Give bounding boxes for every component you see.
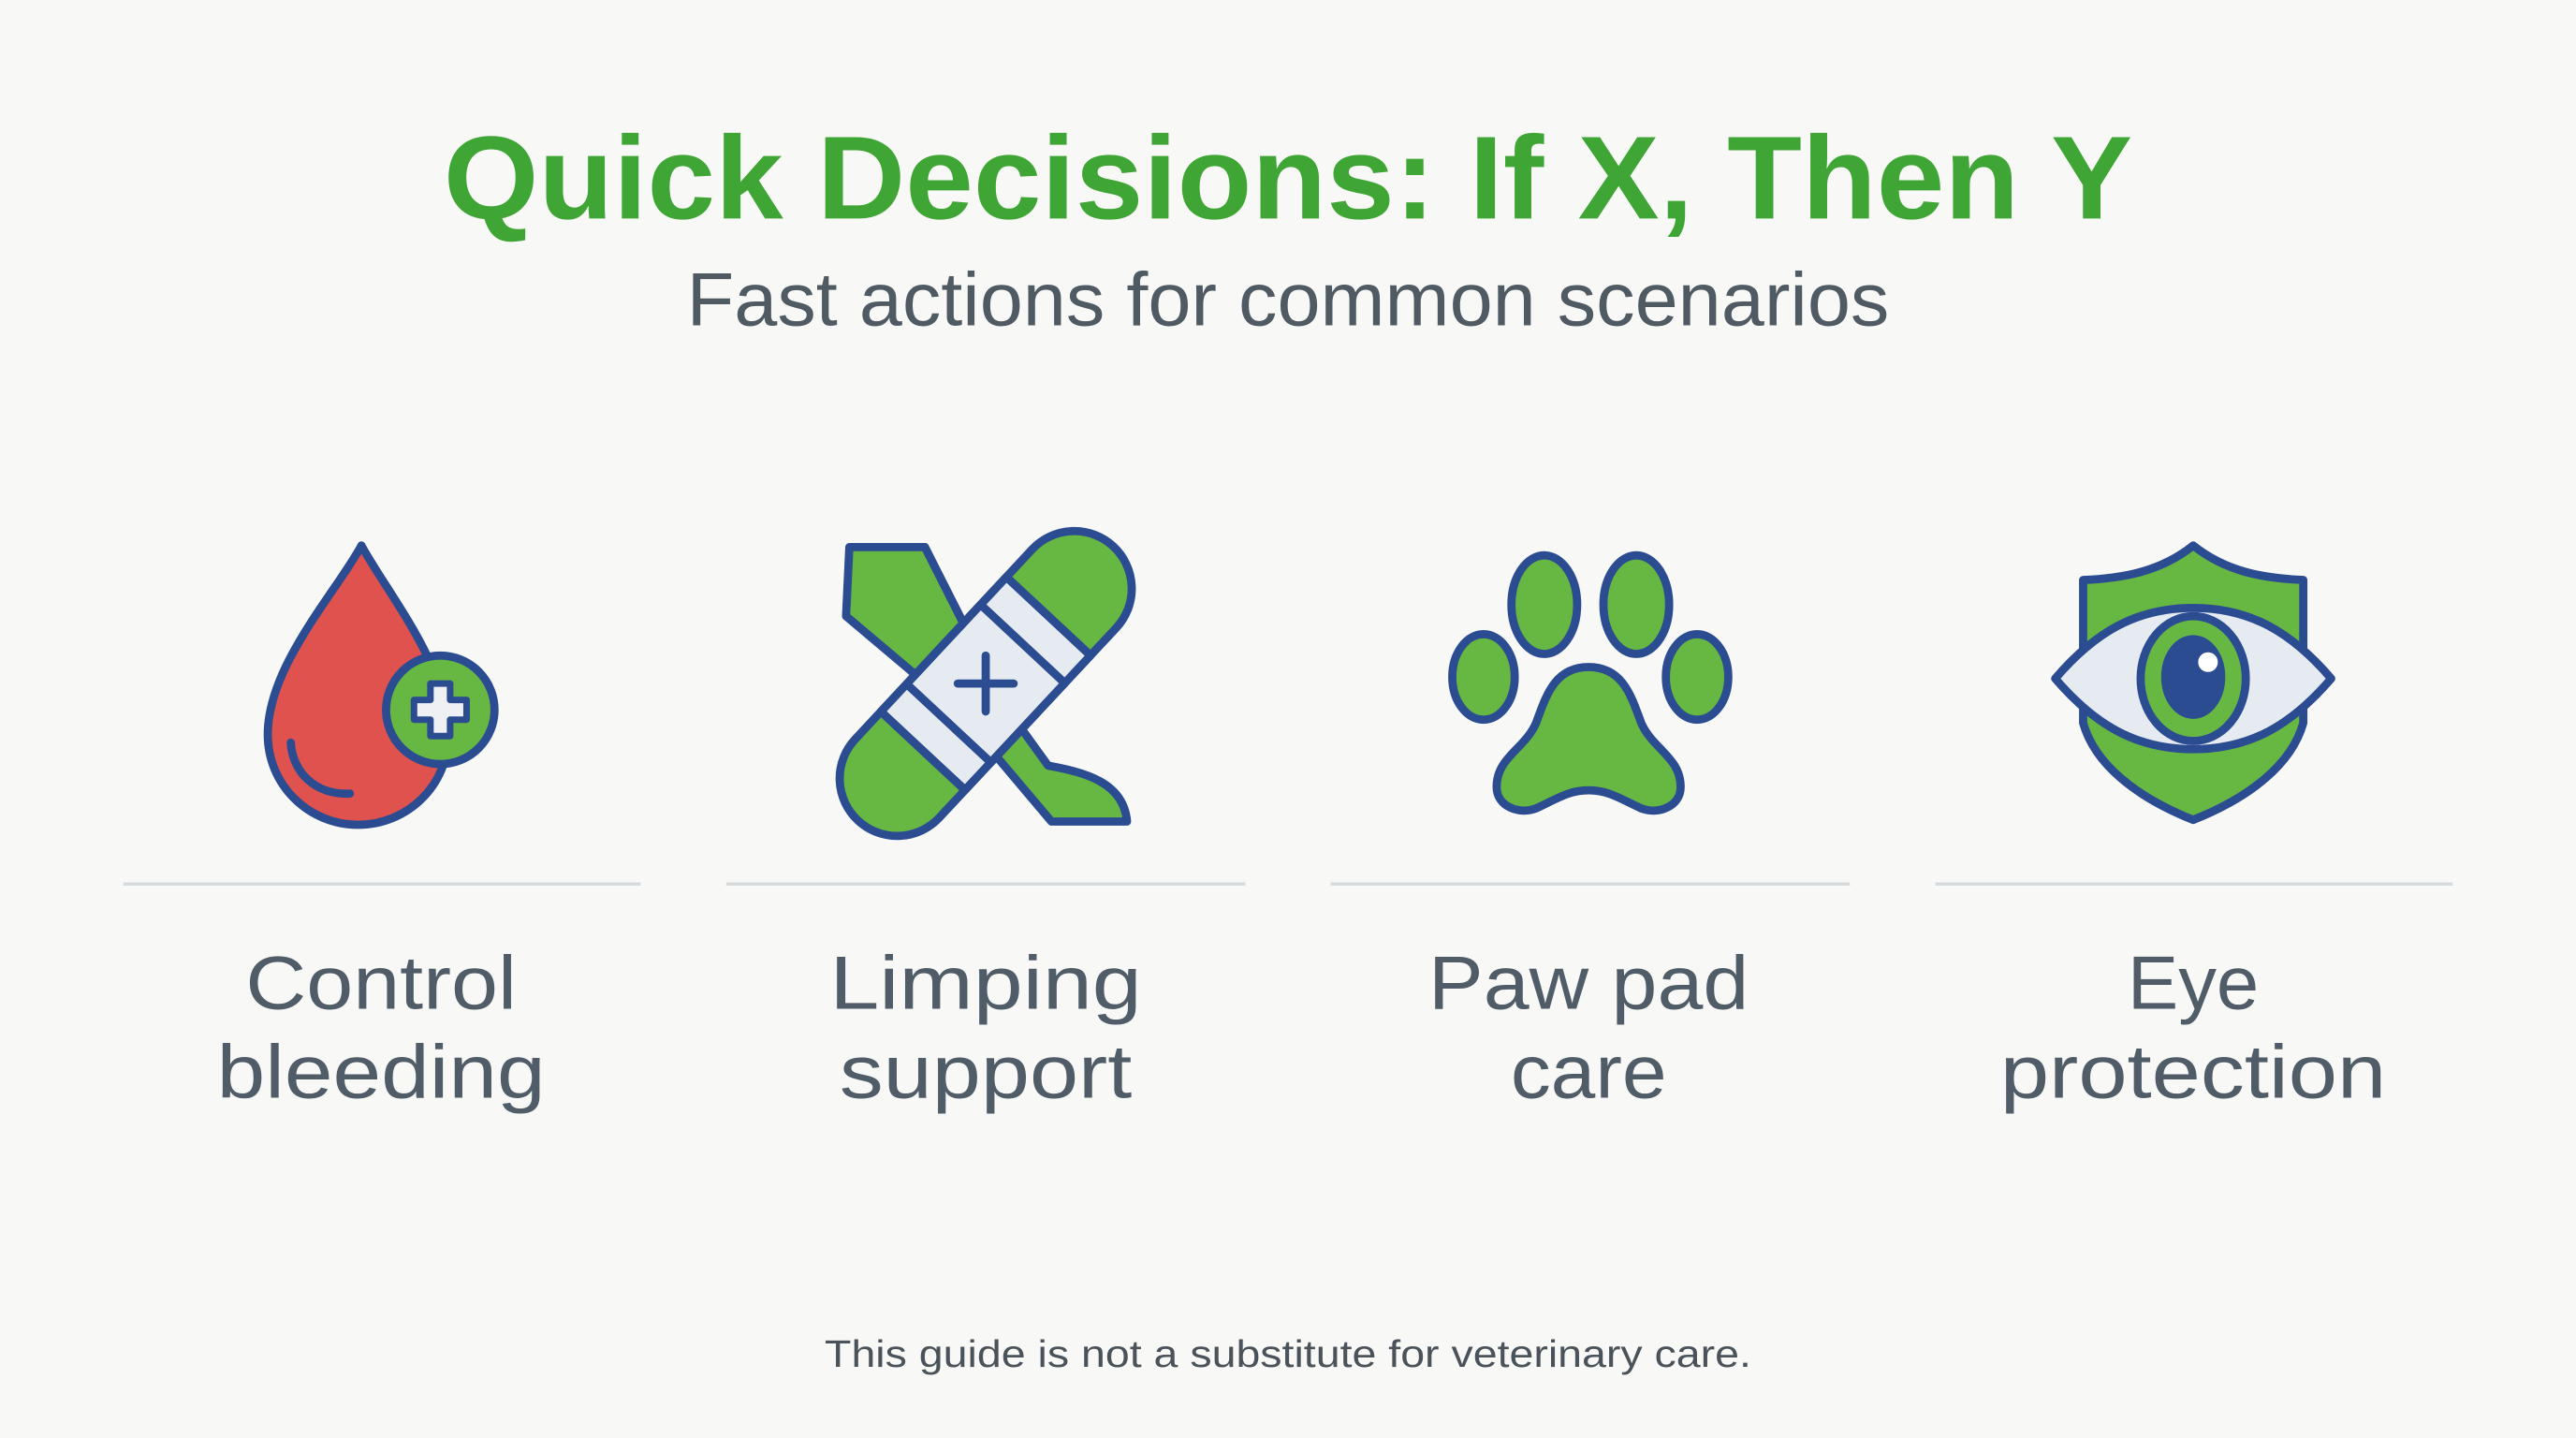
label: control bleeding: Control <box>245 942 517 1026</box>
label: limping support: Limping <box>829 942 1142 1026</box>
label: limping support: support <box>840 1030 1132 1114</box>
footer disclaimer: This guide is not a substitute for veterinary care. <box>825 1332 1751 1375</box>
label: eye protection: Eye <box>2128 942 2259 1026</box>
icon: leg with bandage <box>816 507 1155 859</box>
label: eye protection: protection <box>2000 1030 2386 1114</box>
label: limping support <box>829 942 1142 1114</box>
subtitle: Fast actions for common scenarios <box>687 257 1889 342</box>
label: paw pad care: care <box>1511 1030 1667 1114</box>
label: control bleeding <box>217 942 546 1114</box>
icon: blood drop with plus <box>268 546 494 825</box>
title: Quick Decisions: If X, Then Y <box>444 111 2132 243</box>
label: control bleeding: bleeding <box>217 1030 546 1114</box>
label: paw pad care <box>1428 942 1749 1114</box>
icon: paw <box>1453 555 1728 811</box>
icon: eye shield <box>2056 546 2331 820</box>
label: paw pad care: Paw pad <box>1428 942 1749 1026</box>
label: eye protection <box>2000 942 2386 1114</box>
